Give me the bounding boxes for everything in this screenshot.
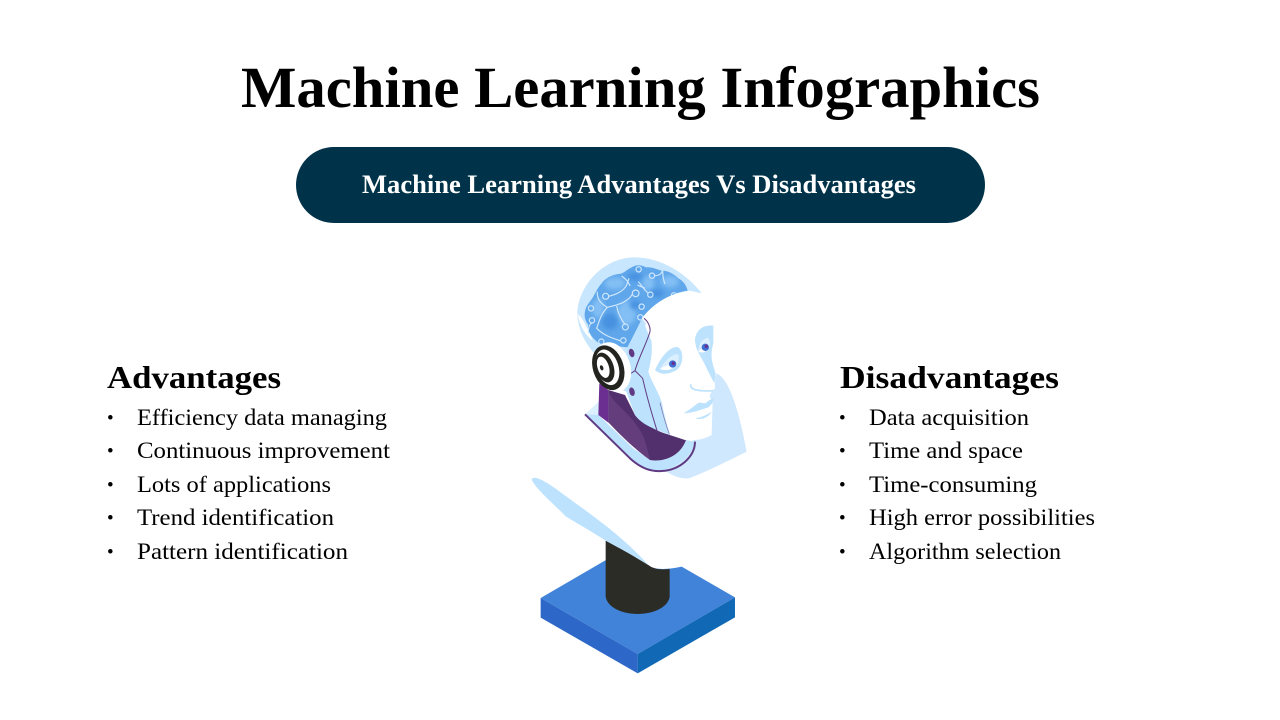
subtitle pill: Machine Learning Advantages Vs Disadvantages	[362, 170, 916, 199]
list: advantages: •	[107, 542, 114, 563]
list: disadvantages: •	[839, 441, 846, 462]
white crescent	[578, 314, 593, 341]
panel: disadvantages	[839, 359, 1095, 564]
column	[606, 541, 670, 614]
list: advantages: Lots of applications	[137, 472, 331, 497]
brain	[584, 265, 688, 348]
face plate	[642, 291, 715, 440]
list: advantages: •	[107, 408, 114, 429]
list: disadvantages: Algorithm selection	[869, 539, 1062, 564]
face features	[655, 325, 716, 419]
list: advantages: •	[107, 508, 114, 529]
list: disadvantages: •	[839, 542, 846, 563]
circuit lines	[630, 318, 657, 432]
neck and collar	[585, 383, 695, 471]
light blue fin	[532, 478, 648, 565]
heading: advantages: Advantages	[107, 359, 281, 395]
list: advantages: •	[107, 475, 114, 496]
dark purple neck	[608, 390, 686, 460]
ear speaker	[586, 337, 637, 397]
list: advantages: •	[107, 441, 114, 462]
nose	[691, 384, 713, 391]
panel bolts	[628, 348, 636, 397]
collar inner band	[585, 414, 695, 471]
back of head	[577, 257, 702, 393]
bright purple stripe	[598, 383, 608, 423]
collar pale wedge	[585, 401, 599, 417]
panel: advantages	[107, 359, 391, 564]
list: advantages: Efficiency data managing	[137, 405, 388, 430]
shoulder shape	[660, 373, 747, 478]
icon: robot head on pedestal	[532, 257, 747, 673]
infographic canvas	[107, 66, 1094, 674]
eye left	[655, 347, 682, 374]
eye right	[695, 325, 716, 383]
platform	[541, 560, 735, 673]
head front	[625, 291, 715, 440]
mouth	[683, 398, 713, 419]
list: disadvantages: Time and space	[869, 438, 1023, 463]
jaw edge line	[660, 403, 669, 434]
list: disadvantages: •	[839, 475, 846, 496]
list: disadvantages	[839, 405, 1095, 564]
list: advantages: Continuous improvement	[137, 438, 391, 463]
list: disadvantages: Time-consuming	[869, 472, 1038, 497]
list: advantages: Pattern identification	[137, 539, 349, 564]
subtitle pill	[296, 147, 985, 223]
list: disadvantages: High error possibilities	[869, 505, 1095, 530]
white neck highlight	[600, 557, 682, 569]
list: disadvantages: •	[839, 408, 846, 429]
title: Machine Learning Infographics	[241, 55, 1040, 120]
mid purple panel	[608, 390, 650, 460]
collar line	[585, 414, 695, 471]
list: disadvantages: •	[839, 508, 846, 529]
list: disadvantages: Data acquisition	[869, 405, 1030, 430]
list: advantages	[107, 405, 391, 564]
neck panel	[625, 318, 671, 435]
heading: disadvantages: Disadvantages	[840, 359, 1059, 395]
list: advantages: Trend identification	[137, 505, 335, 530]
pedestal	[532, 478, 735, 673]
robot head	[577, 257, 747, 478]
